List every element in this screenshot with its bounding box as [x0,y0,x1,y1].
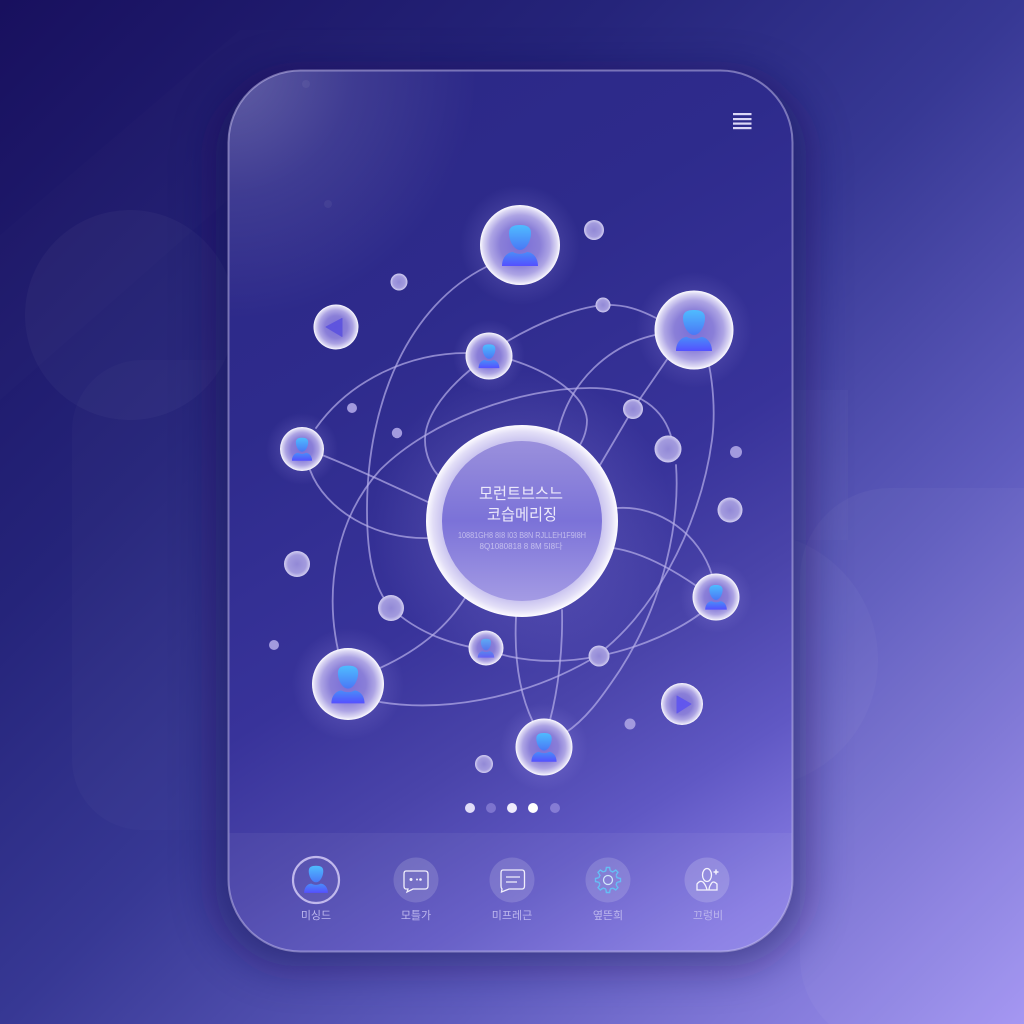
hub description: 8Q1080818 8 8M 5I8다 [480,542,563,551]
hub title [479,485,563,524]
avatar node: bottom left [312,648,384,720]
bottom nav: account tab [684,858,730,922]
network connection lines [310,267,714,733]
phone card panel [228,70,792,952]
icon: gear [596,868,620,892]
hub title: 모런트브스느 [479,485,563,503]
bottom nav: chat tab: 모틀가 [401,909,431,922]
avatar node: top right [654,290,734,370]
tiny floating dots [269,403,742,730]
phone card shadow [216,76,806,966]
avatar node: top [480,205,560,285]
bottom nav: profile tab [293,857,339,922]
avatar node: left [280,427,324,471]
pagination dots [465,803,560,813]
avatar node: small lower center [468,630,504,666]
avatar node: right [692,574,740,620]
hub description [458,531,586,551]
hub description: 10881GH8 8I8 I03 B8N RJLLEH1F9I8H [458,531,586,540]
bottom nav: messages tab: 미프레근 [492,909,532,922]
bottom nav: settings tab [586,858,630,922]
avatar node: bottom [516,718,572,776]
icon: play triangle node [661,683,703,725]
bottom nav: account tab: 끄렁비 [693,909,723,922]
small floating nodes [284,220,742,773]
central hub [426,425,618,617]
panel: bottom navigation background [229,833,792,951]
icon: back triangle node [314,304,358,350]
bottom nav: profile tab: 미싱드 [301,909,331,922]
decorative faint specks [302,80,332,208]
soft glow behind network [266,185,752,791]
bottom nav: settings tab: 옆뜬희 [593,909,623,922]
bottom nav: chat tab [394,858,438,922]
hub title: 코습메리징 [487,506,557,524]
avatar node: upper center [466,332,512,380]
icon: hamburger menu [733,113,752,129]
bottom nav: messages tab [490,858,534,922]
